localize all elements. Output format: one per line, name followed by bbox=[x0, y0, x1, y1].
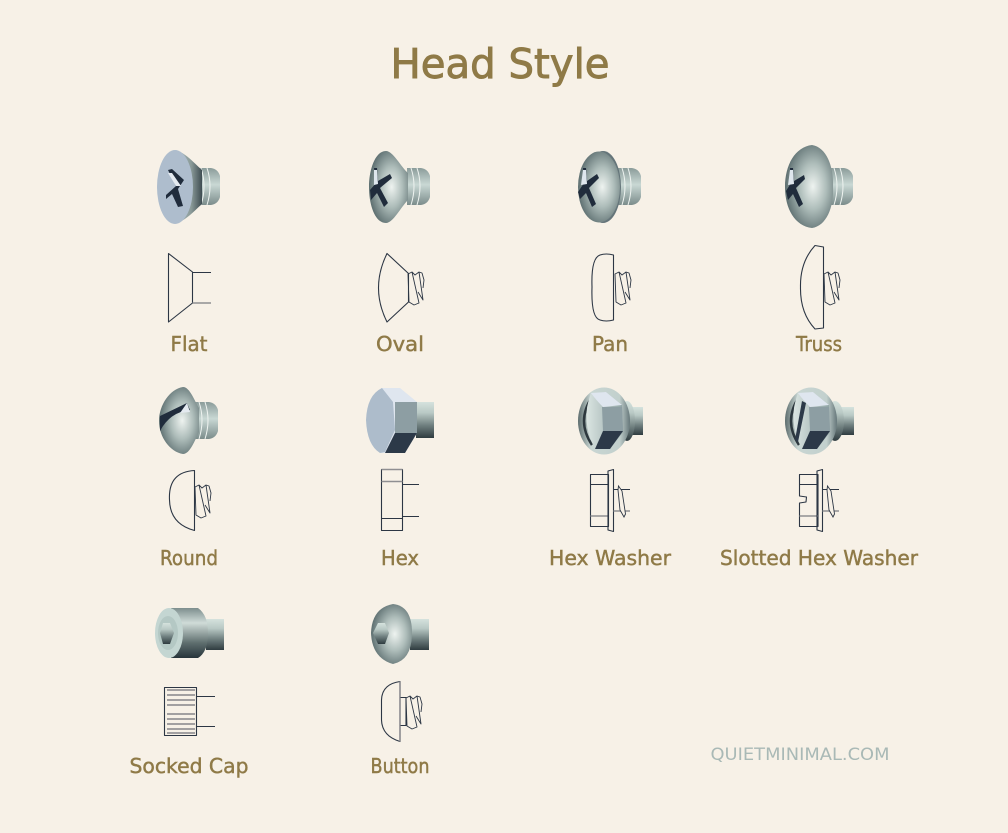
screw: hex washer bbox=[549, 388, 672, 570]
screw: round bbox=[159, 387, 218, 570]
render: button head bbox=[371, 604, 429, 664]
title: Head Style bbox=[390, 40, 610, 88]
watermark: QUIETMINIMAL.COM bbox=[710, 745, 890, 765]
outline: round head bbox=[169, 470, 211, 530]
label: Hex: Hex bbox=[381, 546, 419, 570]
outline: oval head bbox=[378, 254, 424, 322]
outline: pan head bbox=[592, 254, 631, 321]
screw: pan bbox=[578, 151, 641, 356]
label: Oval: Oval bbox=[376, 332, 424, 356]
label: Truss: Truss bbox=[795, 332, 842, 356]
outline: truss head bbox=[800, 246, 840, 329]
outline: socket cap head bbox=[164, 688, 215, 736]
label: Slotted Hex Washer: Slotted Hex Washer bbox=[720, 546, 919, 570]
label: Hex Washer: Hex Washer bbox=[549, 546, 672, 570]
outline: slotted hex washer head bbox=[800, 470, 839, 532]
render: slotted hex washer head bbox=[785, 388, 854, 454]
render: flat head bbox=[157, 150, 220, 224]
render: hex head bbox=[366, 388, 434, 453]
render: round head bbox=[159, 387, 218, 454]
render: socket cap head bbox=[155, 608, 224, 658]
render: oval head bbox=[369, 151, 430, 223]
screw: slotted hex washer bbox=[720, 388, 919, 570]
label: Socked Cap: Socked Cap bbox=[130, 754, 248, 778]
render: pan head bbox=[578, 151, 641, 223]
label: Round: Round bbox=[160, 546, 218, 570]
outline: hex head bbox=[382, 470, 419, 530]
screw: truss bbox=[785, 145, 853, 356]
label: Flat: Flat bbox=[170, 332, 208, 356]
outline: flat head bbox=[168, 254, 211, 322]
render: truss head bbox=[785, 145, 853, 228]
outline: button head bbox=[382, 682, 422, 742]
label: Pan: Pan bbox=[592, 332, 628, 356]
screw: button bbox=[370, 604, 430, 778]
screw: flat bbox=[157, 150, 220, 356]
label: Button: Button bbox=[370, 754, 430, 778]
screw: socket cap bbox=[130, 608, 248, 778]
outline: hex washer head bbox=[590, 470, 630, 532]
render: hex washer head bbox=[578, 388, 643, 454]
screw: oval bbox=[369, 151, 430, 356]
screw: hex bbox=[366, 388, 434, 570]
